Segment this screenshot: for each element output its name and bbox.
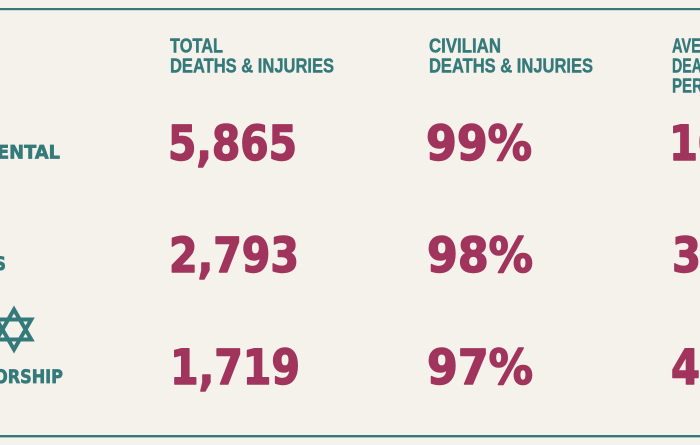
row one values: 99% — [426, 116, 532, 172]
row three values — [170, 340, 700, 396]
heading: total deaths and injuries — [170, 36, 334, 78]
row three values: 97% — [427, 340, 533, 396]
row two values — [169, 228, 700, 284]
heading: total deaths and injuries: DEATHS & INJURIES — [170, 56, 334, 78]
row one values — [168, 116, 700, 172]
icon: star of David — [0, 310, 31, 350]
heading: cropped third column — [672, 36, 700, 98]
row two values: 98% — [427, 228, 533, 284]
heading: total deaths and injuries: TOTAL — [170, 36, 223, 58]
heading: civilian deaths and injuries — [429, 36, 593, 78]
row three values: 1,719 — [170, 340, 300, 396]
row one values: 5,865 — [168, 116, 297, 172]
heading: civilian deaths and injuries: CIVILIAN — [429, 36, 501, 58]
row two values: 2,793 — [169, 228, 299, 284]
heading: civilian deaths and injuries: DEATHS & INJURIES — [429, 56, 593, 78]
